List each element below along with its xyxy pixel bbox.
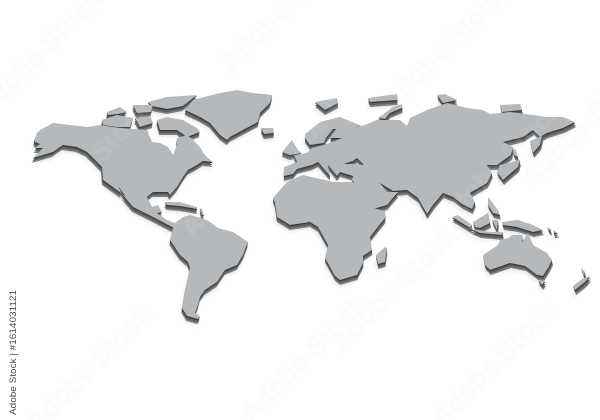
watermarks over the map: Adobe Stock [175, 104, 313, 243]
island group: Southeast Asia [452, 197, 558, 235]
island group: Arctic Russia [315, 94, 522, 119]
watermarks over the map: Adobe Stock [20, 94, 158, 233]
stock image credit: Adobe Stock | #1614031121 [8, 290, 19, 415]
island group: Japan [497, 147, 520, 180]
watermarks over the map: Adobe Stock [255, 49, 393, 188]
island: Iceland [261, 128, 274, 134]
peninsula: Kamchatka [530, 136, 542, 153]
island: Great Britain and Ireland [282, 140, 302, 155]
island: Madagascar [376, 247, 387, 264]
watermarks over the map: Adobe Stock [430, 94, 568, 233]
continent: Eurasia [284, 103, 575, 214]
continent: Greenland [185, 90, 272, 140]
island group: Canadian Arctic [102, 95, 200, 137]
island group: Caribbean [165, 202, 204, 215]
continent: Australia [483, 233, 552, 276]
watermarks over the map [20, 49, 568, 243]
continent: Africa [273, 175, 385, 280]
islands: New Zealand [573, 268, 590, 290]
extruded side wall: upper [33, 91, 590, 320]
island: Tasmania [538, 280, 545, 285]
world map top surface [33, 90, 590, 319]
extruded side wall: lower [32, 95, 591, 324]
cast shadow of the map [32, 97, 589, 326]
continent: South America [170, 215, 248, 319]
extruded side wall: middle [32, 93, 591, 322]
continent: North America [33, 123, 213, 228]
watermarks on background: Adobe Stock [325, 219, 463, 358]
